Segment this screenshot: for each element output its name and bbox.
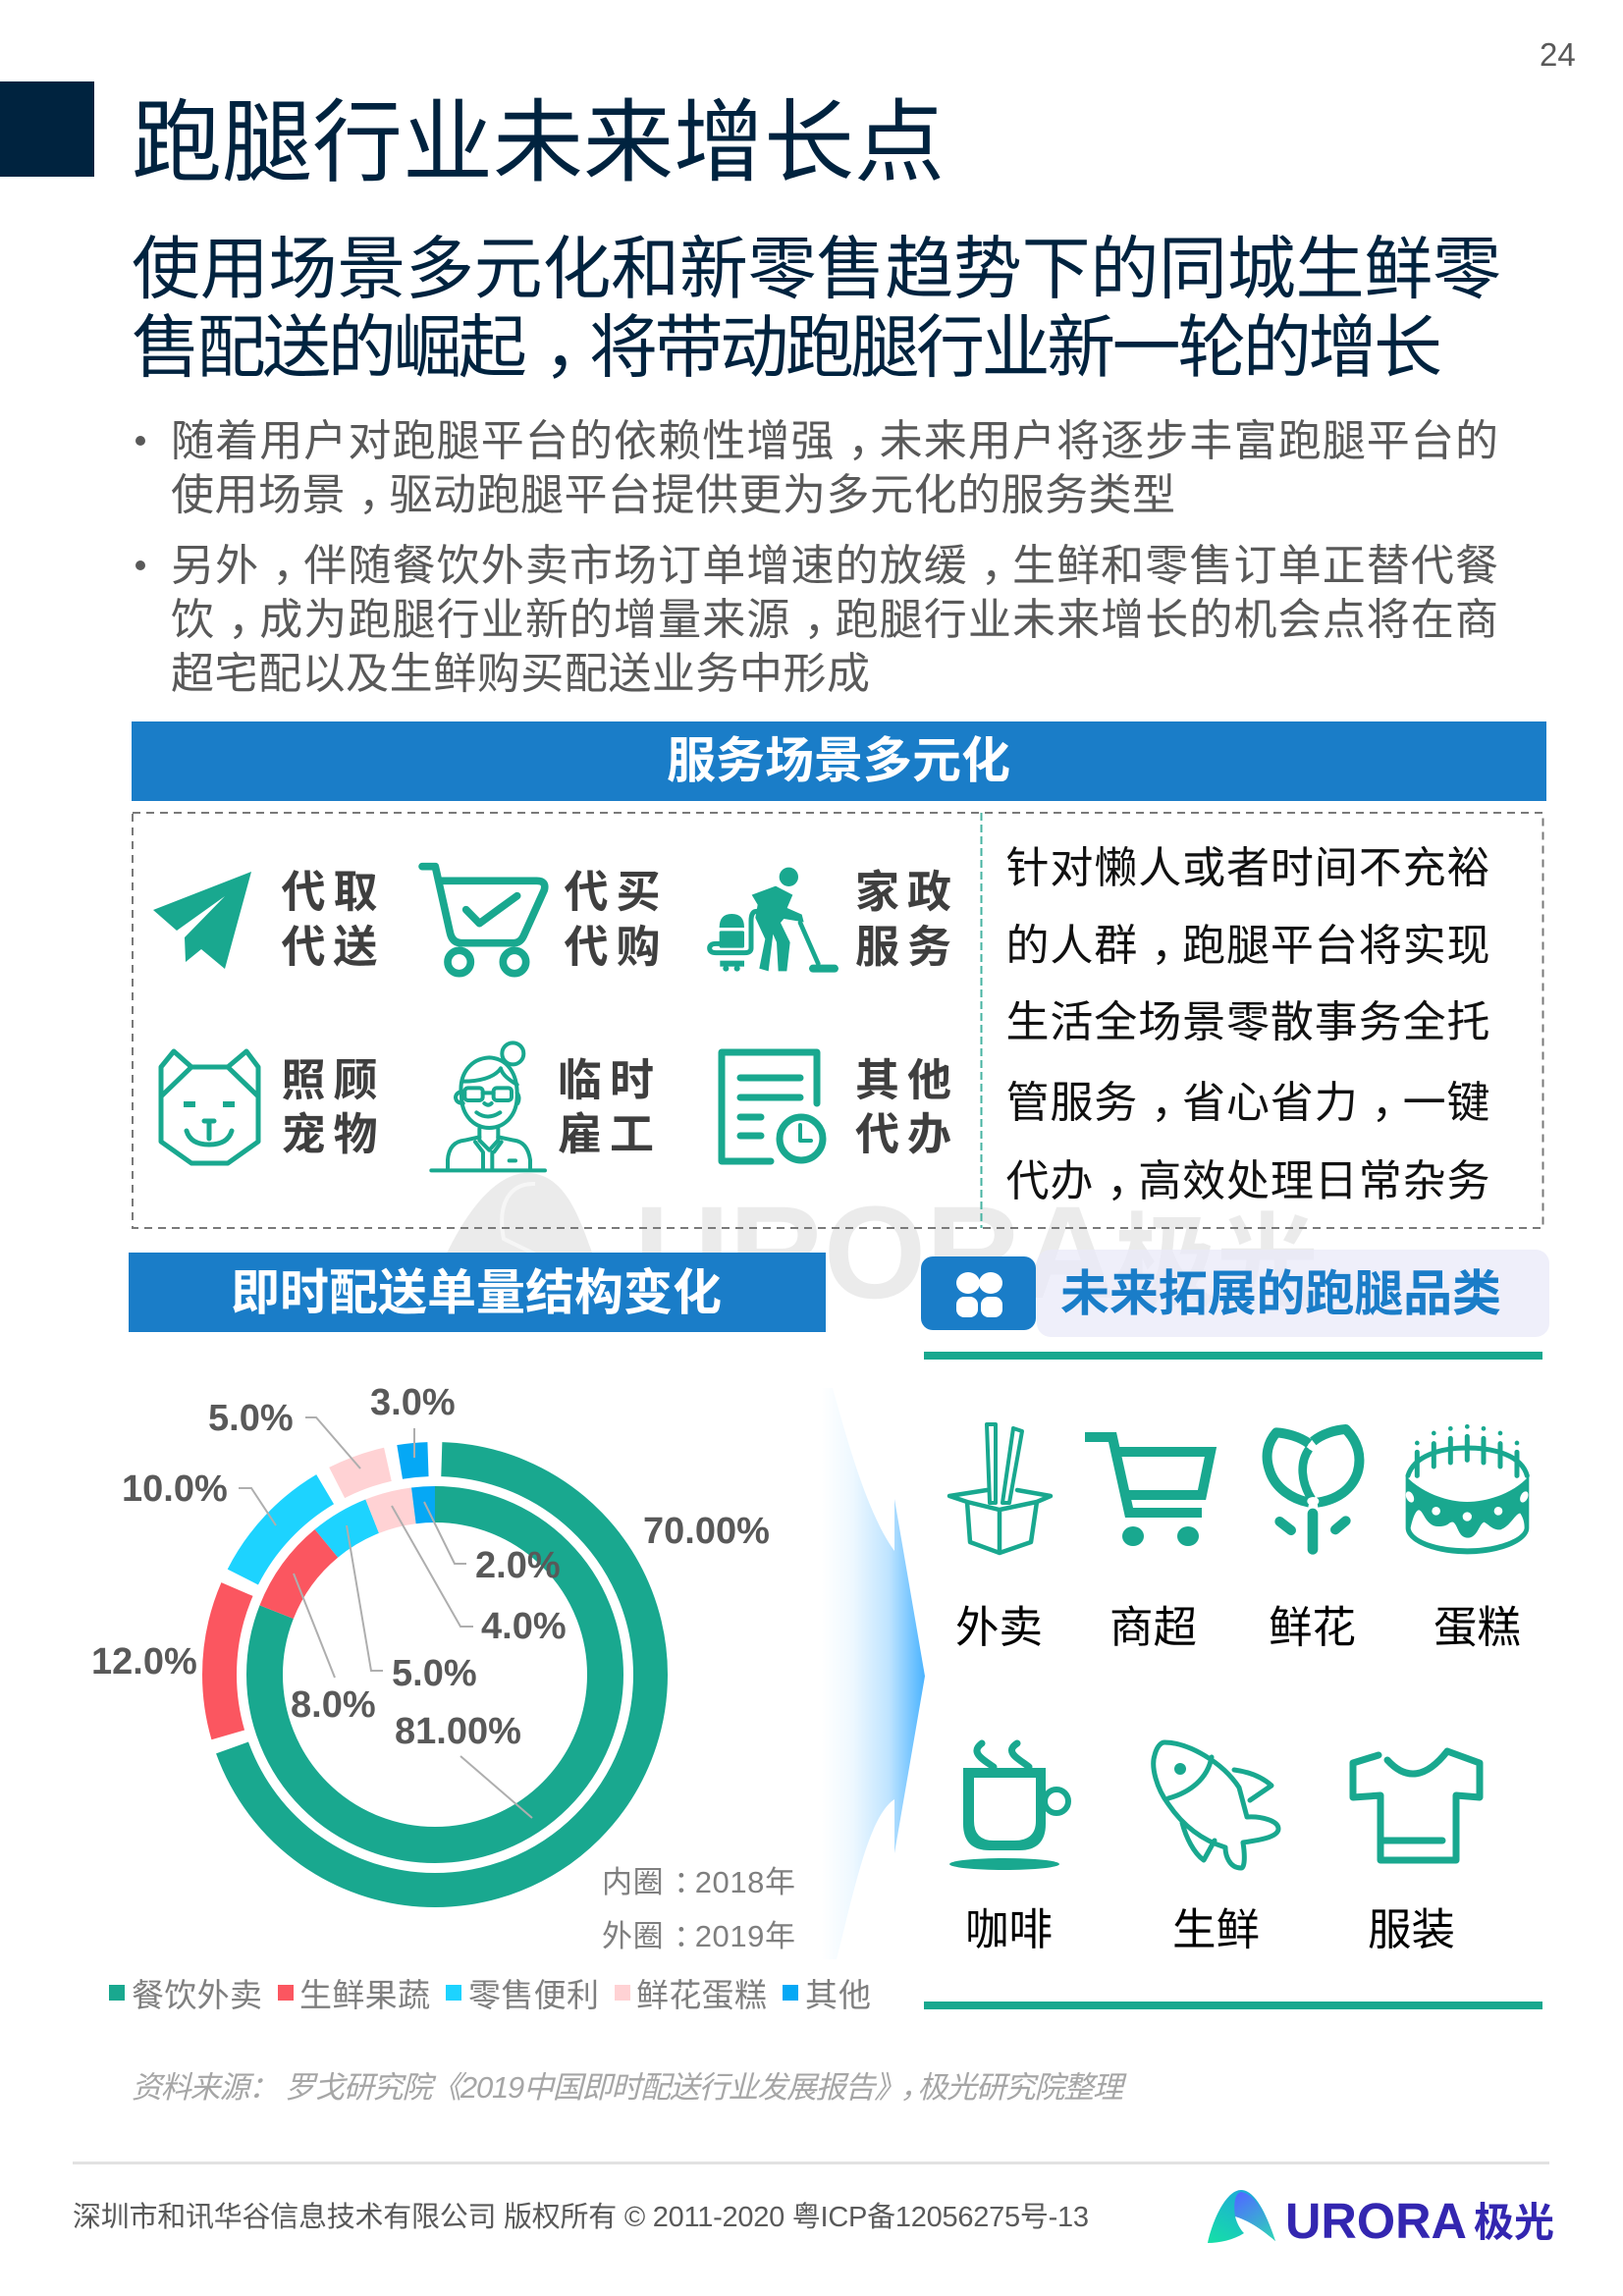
label: housekeeping: 服务: [855, 922, 951, 972]
label: pet care: 照顾: [281, 1055, 378, 1105]
icon: takeout box: [949, 1424, 1051, 1553]
data labels: 12.0%: [91, 1641, 197, 1682]
icon: shopping cart with check: [422, 867, 545, 974]
legend: 零售便利: [468, 1977, 599, 2013]
icon: document with clock: [722, 1052, 823, 1161]
service heading bar: [132, 721, 1546, 801]
chart heading bar: [129, 1253, 826, 1332]
leader lines: [239, 1417, 532, 1818]
labels row one: 外卖: [955, 1604, 1043, 1652]
top rule: [924, 1352, 1542, 1360]
labels row two: 咖啡: [965, 1906, 1053, 1954]
label: housekeeping: 家政: [855, 867, 951, 917]
labels row one: 商超: [1109, 1604, 1197, 1652]
icon: flower: [1268, 1429, 1359, 1549]
legend: 其他: [805, 1977, 871, 2013]
data labels: 8.0%: [291, 1684, 376, 1726]
data labels: 2.0%: [475, 1545, 561, 1586]
data labels: 81.00%: [395, 1711, 521, 1752]
chart heading bar: 即时配送单量结构变化: [231, 1265, 722, 1320]
watermark logo: [422, 1173, 1319, 1326]
bullet text: 随着用户对跑腿平台的依赖性增强 ，未来用户将逐步丰富跑腿平台的: [171, 417, 1498, 465]
description text: [1005, 844, 1490, 1205]
icon: t-shirt: [1353, 1751, 1480, 1860]
watermark logo: URORA: [634, 1180, 1115, 1326]
legend: 生鲜果蔬: [299, 1977, 430, 2013]
icon: coffee cup: [949, 1743, 1068, 1870]
labels row two: 生鲜: [1172, 1906, 1260, 1954]
label: temp hire: [558, 1055, 654, 1159]
label: purchase: 代买: [564, 867, 661, 917]
label: pet care: 宠物: [281, 1109, 378, 1159]
panel: service scenarios: [133, 813, 1543, 1228]
bullet text: [135, 417, 1498, 698]
title: 跑腿行业未来增长点: [132, 93, 945, 193]
data labels: [91, 1382, 770, 1752]
watermark logo: 极光: [1114, 1206, 1319, 1320]
label: temp hire: 雇工: [558, 1109, 654, 1159]
future categories heading: [921, 1250, 1549, 1337]
label: other errands: 其他: [855, 1055, 951, 1105]
page number: 24: [1540, 36, 1576, 73]
labels row two: [965, 1906, 1455, 1954]
bottom rule: [924, 2002, 1542, 2009]
source note: 资料来源： 罗戈研究院《2019中国即时配送行业发展报告》 ，极光研究院整理: [132, 2070, 1127, 2105]
label: housekeeping: [855, 867, 951, 972]
description text: 针对懒人或者时间不充裕: [1005, 844, 1490, 892]
data labels: 10.0%: [122, 1468, 228, 1510]
subtitle: 售配送的崛起，将带动跑腿行业新一轮的增长: [132, 309, 1442, 386]
service heading bar: 服务场景多元化: [667, 733, 1010, 788]
donut chart: [91, 1382, 770, 1891]
description text: 生活全场景零散事务全托: [1005, 998, 1490, 1046]
ring captions: [602, 1865, 795, 1953]
footer logo: URORA: [1285, 2193, 1467, 2249]
arrow: [822, 1388, 925, 1959]
icon: dog face: [161, 1051, 258, 1163]
icon: paper plane: [153, 872, 251, 969]
icon: woman with glasses: [431, 1042, 545, 1170]
inner ring 2018: [265, 1504, 605, 1845]
label: other errands: 代办: [855, 1109, 951, 1159]
label: temp hire: 临时: [558, 1055, 654, 1105]
footer rule: [73, 2162, 1549, 2164]
footer copyright: 深圳市和讯华谷信息技术有限公司 版权所有 © 2011-2020 粤ICP备12056275号-13: [73, 2201, 1089, 2233]
icon: fish: [1154, 1742, 1278, 1868]
ring captions: 外圈 ：2019年: [602, 1919, 795, 1953]
labels row one: [955, 1604, 1521, 1652]
panel: future categories: [949, 1424, 1530, 1954]
data labels: 5.0%: [208, 1398, 294, 1439]
subtitle: 使用场景多元化和新零售趋势下的同城生鲜零: [132, 231, 1501, 307]
icon: supermarket cart: [1085, 1437, 1211, 1546]
outer ring 2019: [220, 1459, 650, 1891]
legend: 鲜花蛋糕: [636, 1977, 767, 2013]
labels row one: 蛋糕: [1434, 1604, 1521, 1652]
subtitle: [132, 231, 1501, 386]
label: purchase: 代购: [564, 922, 661, 972]
future categories heading: 未来拓展的跑腿品类: [1060, 1266, 1501, 1321]
bullet text: 另外 ，伴随餐饮外卖市场订单增速的放缓 ，生鲜和零售订单正替代餐: [171, 542, 1498, 590]
label: pick-up delivery: 代取: [281, 867, 378, 917]
bullet text: 饮 ，成为跑腿行业新的增量来源 ，跑腿行业未来增长的机会点将在商: [171, 596, 1498, 644]
data labels: 70.00%: [643, 1511, 770, 1552]
icon: cake: [1404, 1424, 1530, 1554]
bullet text: 超宅配以及生鲜购买配送业务中形成: [171, 650, 870, 698]
bullet text: 使用场景 ，驱动跑腿平台提供更为多元化的服务类型: [171, 471, 1175, 519]
data labels: 4.0%: [481, 1606, 567, 1647]
icon: four blobs: [956, 1272, 1002, 1317]
description text: 代办 ，高效处理日常杂务: [1005, 1157, 1490, 1205]
header square: [0, 81, 94, 177]
description text: 管服务 ，省心省力 ，一键: [1005, 1079, 1490, 1127]
label: pet care: [281, 1055, 378, 1159]
label: other errands: [855, 1055, 951, 1159]
labels row two: 服装: [1368, 1906, 1455, 1954]
icon: housekeeper with vacuum: [710, 868, 839, 973]
legend: [109, 1977, 871, 2013]
labels row one: 鲜花: [1269, 1604, 1356, 1652]
footer logo: 极光: [1474, 2200, 1554, 2245]
description text: 的人群 ，跑腿平台将实现: [1005, 922, 1490, 970]
data labels: 5.0%: [392, 1653, 477, 1694]
ring captions: 内圈 ：2018年: [602, 1865, 795, 1899]
footer logo: [1208, 2190, 1554, 2249]
label: purchase: [564, 867, 661, 972]
label: pick-up delivery: [281, 867, 378, 972]
legend: 餐饮外卖: [132, 1977, 262, 2013]
data labels: 3.0%: [370, 1382, 456, 1423]
label: pick-up delivery: 代送: [281, 922, 378, 972]
